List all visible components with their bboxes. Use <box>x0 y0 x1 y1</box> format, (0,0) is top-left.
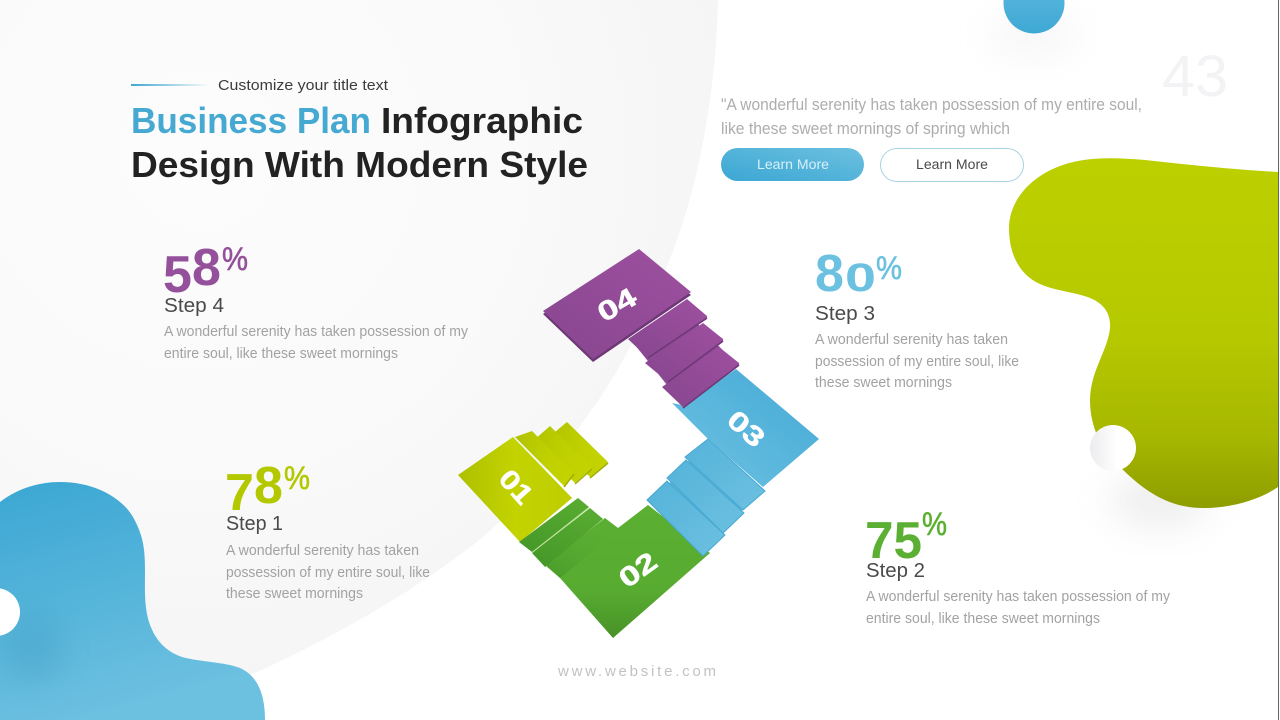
step 03 blue <box>647 369 819 556</box>
stat: step 3: these sweet mornings <box>815 375 952 391</box>
icon: white circle <box>1090 425 1136 471</box>
stat: step 3: % <box>876 250 902 286</box>
stat: step 3: possession of my entire soul, like <box>815 354 1019 370</box>
title block <box>131 77 588 185</box>
stat: step 2: 75 <box>865 512 922 570</box>
stat: step 4: Step 4 <box>164 295 224 317</box>
stat: step 1: 8 <box>254 457 283 515</box>
button: outline Learn More <box>880 148 1024 182</box>
blob: blue bottom left <box>0 482 265 720</box>
diagram: square staircase <box>458 249 819 638</box>
stat: step 2: entire soul, like these sweet mornings <box>866 611 1100 627</box>
stat: step 4: A wonderful serenity has taken possession of my <box>164 324 469 340</box>
icon: white half circle <box>0 588 20 636</box>
quote text: like these sweet mornings of spring which <box>721 120 1010 138</box>
stat: step 3: 0 <box>845 256 876 300</box>
button: outline Learn More: Learn More <box>916 157 988 172</box>
stat: step 1 <box>225 457 430 602</box>
stat: step 2: A wonderful serenity has taken possession of my <box>866 589 1171 605</box>
right edge line <box>1278 0 1279 720</box>
heading: Business Plan <box>131 100 371 141</box>
step 04 purple: 04 <box>592 282 642 328</box>
stat: step 4 <box>163 239 469 362</box>
blob: green top right <box>1009 158 1278 528</box>
stat: step 2: % <box>922 506 947 542</box>
stat: step 3: Step 3 <box>815 303 875 325</box>
stat: step 1: possession of my entire soul, like <box>226 565 430 581</box>
stat: step 4: % <box>222 241 248 277</box>
stat: step 2 <box>865 506 1171 627</box>
stat: step 3: A wonderful serenity has taken <box>815 332 1008 348</box>
stat: step 4: 8 <box>192 239 221 297</box>
website footer: www.website.com <box>557 663 716 680</box>
icon: blue circle top <box>989 0 1079 57</box>
button: filled Learn More <box>721 148 864 181</box>
background shape: large grey arc <box>0 0 718 720</box>
step 02 green <box>519 498 710 638</box>
step 01 olive: 01 <box>493 464 539 510</box>
stat: step 1: Step 1 <box>226 513 283 535</box>
stat: step 4: 5 <box>163 246 192 304</box>
stat: step 4: entire soul, like these sweet mornings <box>164 346 398 362</box>
stat: step 1: these sweet mornings <box>226 586 363 602</box>
stat: step 1: A wonderful serenity has taken <box>226 543 419 559</box>
stat: step 3 <box>815 245 1019 391</box>
step 03 blue: 03 <box>721 404 771 454</box>
stat: step 1: % <box>284 460 310 496</box>
stat: step 3: 8 <box>815 245 844 303</box>
heading: Infographic <box>381 100 583 141</box>
step 02 green: 02 <box>613 546 663 594</box>
step 01 olive <box>458 422 608 542</box>
step 04 purple <box>543 249 739 408</box>
stat: step 1: 7 <box>225 464 254 522</box>
stat: step 2: Step 2 <box>866 560 925 582</box>
page number: 43 <box>1162 44 1228 109</box>
button: filled Learn More: Learn More <box>757 157 829 172</box>
title block: Design With Modern Style <box>131 144 588 185</box>
quote text <box>721 96 1142 138</box>
title block: Customize your title text <box>218 77 389 94</box>
quote text: "A wonderful serenity has taken possession of my entire soul, <box>721 96 1142 114</box>
